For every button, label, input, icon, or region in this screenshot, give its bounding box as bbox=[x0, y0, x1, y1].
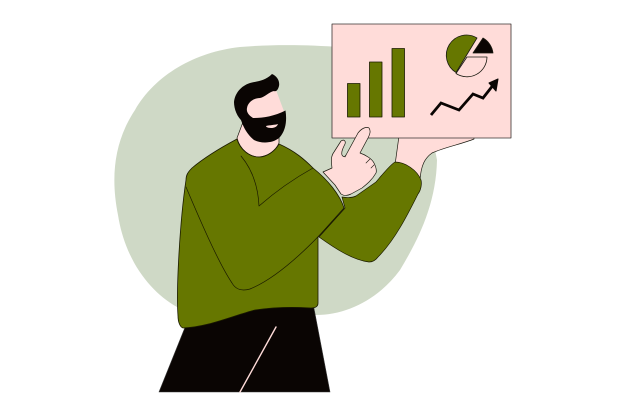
neck bbox=[237, 122, 279, 157]
finger lines bbox=[345, 155, 374, 168]
chart board bbox=[332, 24, 511, 138]
pie chart bbox=[446, 35, 493, 77]
sweater torso bbox=[177, 139, 344, 328]
background blob bbox=[114, 45, 437, 315]
beard bbox=[241, 110, 286, 142]
pointing hand bbox=[323, 127, 376, 196]
bar chart bbox=[348, 48, 404, 117]
trouser crease bbox=[240, 327, 276, 392]
sleeve crease bbox=[241, 156, 313, 206]
hair bbox=[234, 74, 279, 122]
board panel bbox=[332, 24, 511, 138]
upper arm outline bbox=[186, 187, 344, 290]
mouth bbox=[266, 124, 278, 128]
holding hand bbox=[395, 136, 474, 180]
trousers bbox=[159, 298, 330, 392]
face bbox=[245, 84, 285, 128]
head bbox=[234, 74, 286, 142]
growth arrow bbox=[431, 79, 498, 115]
forearm sleeve bbox=[319, 162, 421, 262]
